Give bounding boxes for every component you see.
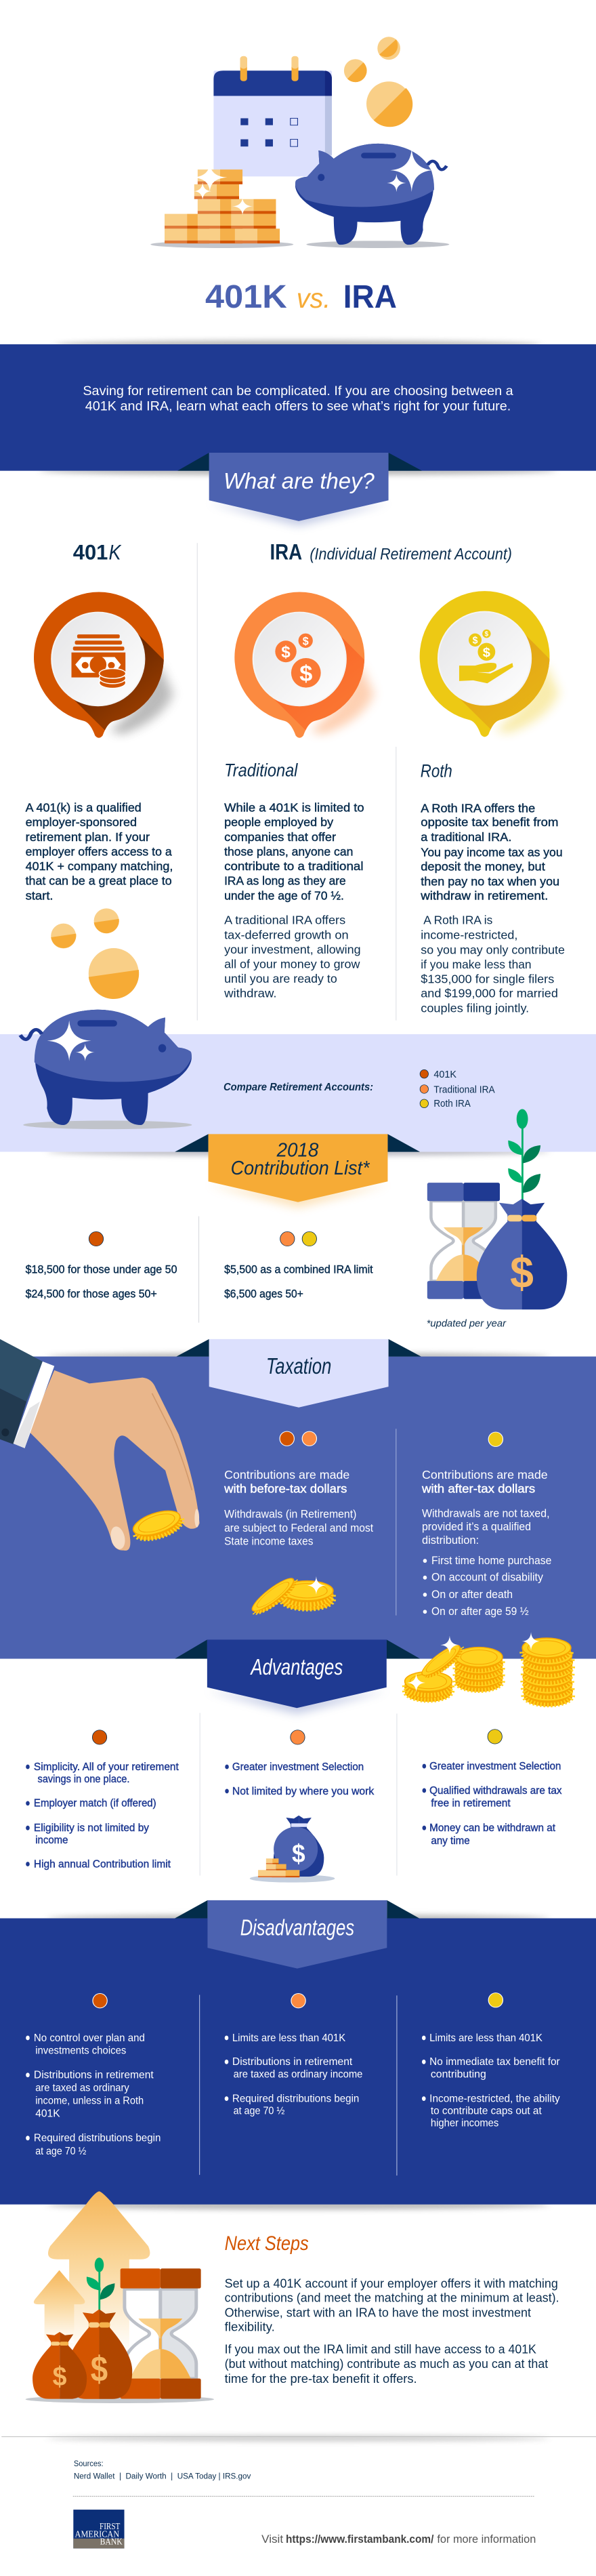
- note: *updated per year: [427, 1318, 507, 1329]
- band: disadvantages: [0, 1919, 596, 2205]
- text: traditional description: companies that offer: [224, 830, 337, 844]
- band: taxation: [0, 1357, 596, 1659]
- text: roth description: withdraw in retirement.: [420, 889, 548, 903]
- band: compare accounts: [0, 1034, 596, 1152]
- column: roth advantages: free in retirement: [431, 1797, 511, 1809]
- illustration: arrows, bags, hourglass: [26, 2191, 214, 2403]
- text: roth description: a traditional IRA.: [421, 830, 511, 844]
- column: after-tax: with after-tax dollars: [421, 1482, 535, 1496]
- heading: IRA: [270, 541, 512, 565]
- column: before-tax: State income taxes: [224, 1535, 314, 1547]
- column: 401K disadvantages: income, unless in a Roth: [35, 2094, 144, 2106]
- text: traditional description: While a 401K is limited to: [224, 801, 364, 815]
- panel: disadvantages: [26, 1900, 560, 2175]
- text: roth description: opposite tax benefit from: [421, 815, 558, 830]
- divider: [396, 1429, 397, 1616]
- ribbon: taxation: [176, 1339, 421, 1408]
- text: 401K description: employer-sponsored: [26, 815, 137, 830]
- icon: falling coins: [344, 37, 412, 127]
- text: roth description: then pay no tax when you: [421, 875, 559, 888]
- text: roth detail: $135,000 for single filers: [421, 973, 554, 986]
- band: intro: [0, 344, 596, 471]
- icon: Roth IRA pin: $: [473, 636, 478, 646]
- column: IRA limits: $5,500 as a combined IRA limit: [224, 1263, 373, 1275]
- heading: 401K: 401: [73, 541, 108, 565]
- website line: https://www.firstambank.com/: [286, 2532, 433, 2546]
- icon: money bag with coins: $: [292, 1839, 305, 1868]
- column: 401K disadvantages: Required distributions begin: [34, 2131, 161, 2144]
- column: roth disadvantages: contributing: [431, 2068, 486, 2080]
- text: traditional detail: your investment, allowing: [224, 943, 361, 957]
- icon: piggy bank: [295, 144, 449, 248]
- column: after-tax: [421, 1432, 551, 1618]
- column: traditional disadvantages: at age 70 ½: [234, 2104, 284, 2117]
- text: traditional description: IRA as long as they are: [224, 874, 346, 888]
- ribbon: contribution list: [175, 1134, 420, 1208]
- title: IRA: [343, 279, 397, 315]
- section shadows: [39, 340, 557, 2209]
- ribbon: advantages: Advantages: [250, 1654, 343, 1679]
- text: 401K description: that can be a great place to: [26, 874, 172, 888]
- logo: First American Bank: FIRST: [100, 2522, 120, 2532]
- website line: for more information: [437, 2532, 536, 2546]
- column: roth disadvantages: [422, 1993, 560, 2129]
- column: roth advantages: Money can be withdrawn at: [429, 1821, 555, 1834]
- text: roth detail: couples filing jointly.: [421, 1002, 529, 1015]
- title: 401K: [205, 279, 287, 315]
- icon: coin stacks: [150, 163, 293, 248]
- text: roth detail: and $199,000 for married: [421, 987, 558, 1000]
- icon: coins: [248, 1574, 333, 1617]
- text: 401K description: employer offers access to a: [26, 845, 172, 859]
- hero illustration: [150, 37, 449, 248]
- website line: Visit: [261, 2532, 283, 2546]
- column: 401K disadvantages: at age 70 ½: [35, 2144, 86, 2157]
- heading: next steps: Next Steps: [225, 2232, 309, 2255]
- column: 401K limits: $18,500 for those under age 50: [26, 1263, 177, 1275]
- column: 401K disadvantages: [26, 1994, 161, 2157]
- text: 401K description: retirement plan. If your: [26, 830, 150, 844]
- column: 401K advantages: income: [35, 1833, 68, 1846]
- text: 401K description: 401K + company matching,: [26, 859, 173, 874]
- intro text: 401K and IRA, learn what each offers to see what’s right for your future.: [85, 399, 511, 413]
- heading: IRA: IRA: [270, 541, 302, 565]
- column: 401K advantages: Employer match (if offered): [34, 1797, 156, 1809]
- illustration: arrows, bags, hourglass: $: [91, 2349, 108, 2389]
- column: roth disadvantages: No immediate tax benefit for: [429, 2055, 560, 2068]
- column: 401K advantages: Simplicity. All of your retirement: [34, 1760, 179, 1773]
- icon: traditional IRA pin: $: [299, 661, 312, 686]
- panel: next steps: [26, 2191, 559, 2403]
- title: [205, 279, 397, 315]
- icon: Roth IRA pin: $: [483, 645, 490, 660]
- title: vs.: [297, 283, 331, 314]
- column: 401K disadvantages: No control over plan and: [34, 2031, 145, 2044]
- column: roth advantages: [423, 1730, 562, 1847]
- text: traditional description: contribute to a traditional: [224, 859, 364, 874]
- column: traditional advantages: [225, 1730, 375, 1797]
- illustration: arrows, bags, hourglass: $: [53, 2362, 67, 2392]
- icon: Roth IRA pin: $: [485, 631, 488, 638]
- column: IRA limits: [224, 1231, 373, 1300]
- dividers: [200, 1713, 397, 1875]
- text: traditional description: those plans, anyone can: [224, 845, 353, 859]
- panel: compare accounts: [20, 1010, 567, 1329]
- column: after-tax: On or after age 59 ½: [431, 1605, 529, 1618]
- column: before-tax: Withdrawals (in Retirement): [224, 1508, 356, 1520]
- column: roth advantages: Qualified withdrawals are tax: [429, 1784, 562, 1796]
- text: traditional detail: A traditional IRA offers: [224, 914, 345, 927]
- legend: Roth IRA: [433, 1098, 471, 1109]
- column: after-tax: First time home purchase: [431, 1554, 551, 1567]
- panel: what are they: [26, 541, 596, 1021]
- column: after-tax: provided it’s a qualified: [422, 1520, 531, 1533]
- icon: coin stacks: [405, 1632, 572, 1706]
- intro text: [83, 384, 513, 413]
- icon: money bag: $: [510, 1248, 534, 1298]
- column: 401K advantages: [26, 1730, 179, 1870]
- text: traditional description: [224, 801, 364, 903]
- ribbon: disadvantages: Disadvantages: [240, 1915, 354, 1940]
- column: traditional disadvantages: [225, 1994, 362, 2117]
- dividers: [200, 1995, 397, 2175]
- text: 401K description: A 401(k) is a qualified: [26, 801, 142, 815]
- legend: Traditional IRA: [433, 1084, 495, 1095]
- heading: roth: Roth: [421, 761, 452, 781]
- label: compare: Compare Retirement Accounts:: [224, 1080, 373, 1093]
- column: 401K disadvantages: investments choices: [35, 2044, 127, 2056]
- text: next steps: If you max out the IRA limit and still have access to a 401K: [225, 2343, 537, 2356]
- column: after-tax: On account of disability: [431, 1571, 543, 1583]
- text: roth detail: if you make less than: [421, 958, 532, 972]
- intro text: Saving for retirement can be complicated. If you are choosing between a: [83, 384, 513, 398]
- column: before-tax: are subject to Federal and most: [224, 1521, 373, 1534]
- logo: First American Bank: [73, 2510, 125, 2548]
- ribbon: what are they: What are they?: [224, 468, 375, 493]
- column: before-tax: Contributions are made: [224, 1468, 349, 1482]
- column: 401K disadvantages: Distributions in retirement: [34, 2068, 154, 2081]
- column: roth disadvantages: to contribute caps out at: [431, 2104, 542, 2117]
- logo: First American Bank: BANK: [100, 2537, 123, 2547]
- panel: advantages: [26, 1632, 572, 1883]
- footer: [1, 2436, 596, 2548]
- column: traditional disadvantages: Distributions in retirement: [232, 2055, 352, 2068]
- text: roth detail: income-restricted,: [421, 928, 517, 942]
- logo: First American Bank: AMERICAN: [75, 2529, 120, 2539]
- column: 401K advantages: High annual Contribution limit: [34, 1858, 171, 1870]
- text: roth description: [420, 802, 563, 903]
- text: roth detail: [421, 914, 565, 1015]
- heading: traditional: Traditional: [224, 760, 299, 781]
- icon: calendar: [213, 56, 332, 176]
- icon: plant: [508, 1109, 540, 1201]
- illustration: hand holding coin: [0, 1339, 200, 1551]
- text: traditional description: people employed by: [224, 815, 333, 830]
- column: after-tax: Contributions are made: [422, 1468, 548, 1482]
- column: 401K disadvantages: are taxed as ordinary: [35, 2081, 129, 2093]
- column: roth advantages: Greater investment Selection: [429, 1759, 561, 1772]
- icon: traditional IRA pin: $: [303, 635, 309, 647]
- column: 401K disadvantages: 401K: [35, 2107, 60, 2119]
- icon: coins above piggy: [51, 908, 139, 999]
- column: 401K limits: $24,500 for those ages 50+: [26, 1287, 157, 1300]
- ribbon: what are they: [177, 453, 422, 526]
- text: next steps: time for the pre-tax benefit it offers.: [225, 2372, 417, 2386]
- text: roth description: A Roth IRA offers the: [421, 802, 535, 815]
- legend: [420, 1069, 495, 1109]
- icon: traditional IRA pin: [234, 592, 379, 739]
- heading: IRA: (Individual Retirement Account): [310, 544, 512, 563]
- column: roth disadvantages: Income-restricted, the ability: [429, 2092, 560, 2104]
- website line: [261, 2532, 536, 2546]
- column: before-tax: with before-tax dollars: [224, 1482, 347, 1496]
- text: traditional detail: all of your money to grow: [224, 958, 360, 971]
- text: traditional description: under the age of 70 ½.: [224, 889, 344, 903]
- icon: piggy bank: [20, 1010, 192, 1129]
- text: 401K description: start.: [26, 889, 54, 903]
- column: roth advantages: any time: [431, 1834, 470, 1847]
- column: 401K advantages: savings in one place.: [38, 1772, 129, 1785]
- text: traditional detail: until you are ready to: [224, 972, 337, 986]
- panel: taxation: [0, 1339, 551, 1618]
- text: traditional detail: withdraw.: [224, 987, 277, 1000]
- heading: 401K: K: [109, 541, 122, 565]
- text: next steps: Otherwise, start with an IRA to have the most investment: [225, 2306, 531, 2320]
- icon: hourglass: [427, 1183, 500, 1299]
- column: after-tax: On or after death: [431, 1588, 513, 1601]
- text: roth detail: A Roth IRA is: [423, 914, 492, 927]
- divider lines: [197, 543, 396, 1021]
- text: 401K description: [26, 801, 173, 903]
- icon: 401K pin: [34, 592, 177, 739]
- column: roth disadvantages: higher incomes: [431, 2117, 499, 2129]
- sources: Nerd Wallet | Daily Worth | USA Today | IRS.gov: [74, 2471, 251, 2480]
- text: next steps: flexibility.: [225, 2321, 275, 2334]
- ribbon: taxation: Taxation: [266, 1353, 331, 1378]
- column: traditional disadvantages: Required distributions begin: [232, 2092, 359, 2104]
- divider: [198, 1217, 200, 1323]
- column: IRA limits: $6,500 ages 50+: [224, 1287, 303, 1300]
- icon: Roth IRA pin: [420, 591, 564, 738]
- column: after-tax: distribution:: [422, 1534, 479, 1547]
- column: traditional advantages: Greater investment Selection: [232, 1760, 364, 1773]
- column: roth disadvantages: Limits are less than 401K: [429, 2031, 542, 2044]
- icon: traditional IRA pin: $: [281, 642, 291, 661]
- ribbon: contribution list: Contribution List*: [231, 1157, 370, 1179]
- ribbon: disadvantages: [175, 1900, 419, 1969]
- sources: [74, 2459, 251, 2480]
- text: roth description: deposit the money, but: [421, 860, 545, 874]
- column: 401K limits: [26, 1231, 177, 1300]
- column: after-tax: Withdrawals are not taxed,: [422, 1507, 550, 1519]
- legend: 401K: [433, 1069, 456, 1080]
- text: roth detail: so you may only contribute: [421, 943, 565, 957]
- column: traditional advantages: Not limited by where you work: [232, 1784, 375, 1797]
- column: traditional disadvantages: Limits are less than 401K: [232, 2031, 346, 2044]
- column: 401K advantages: Eligibility is not limited by: [34, 1821, 149, 1834]
- text: next steps: [225, 2277, 559, 2386]
- icon: money bag with coins: [250, 1816, 335, 1883]
- sources: Sources:: [74, 2459, 104, 2468]
- column: traditional disadvantages: are taxed as ordinary income: [234, 2068, 362, 2080]
- column: before-tax: [224, 1431, 373, 1547]
- icon: money bag: [477, 1199, 567, 1309]
- text: traditional detail: [224, 914, 361, 1000]
- text: traditional detail: tax-deferred growth on: [224, 928, 349, 942]
- ribbon: contribution list: 2018: [276, 1139, 319, 1161]
- text: roth description: You pay income tax as you: [421, 846, 563, 859]
- ribbon: advantages: [175, 1639, 420, 1714]
